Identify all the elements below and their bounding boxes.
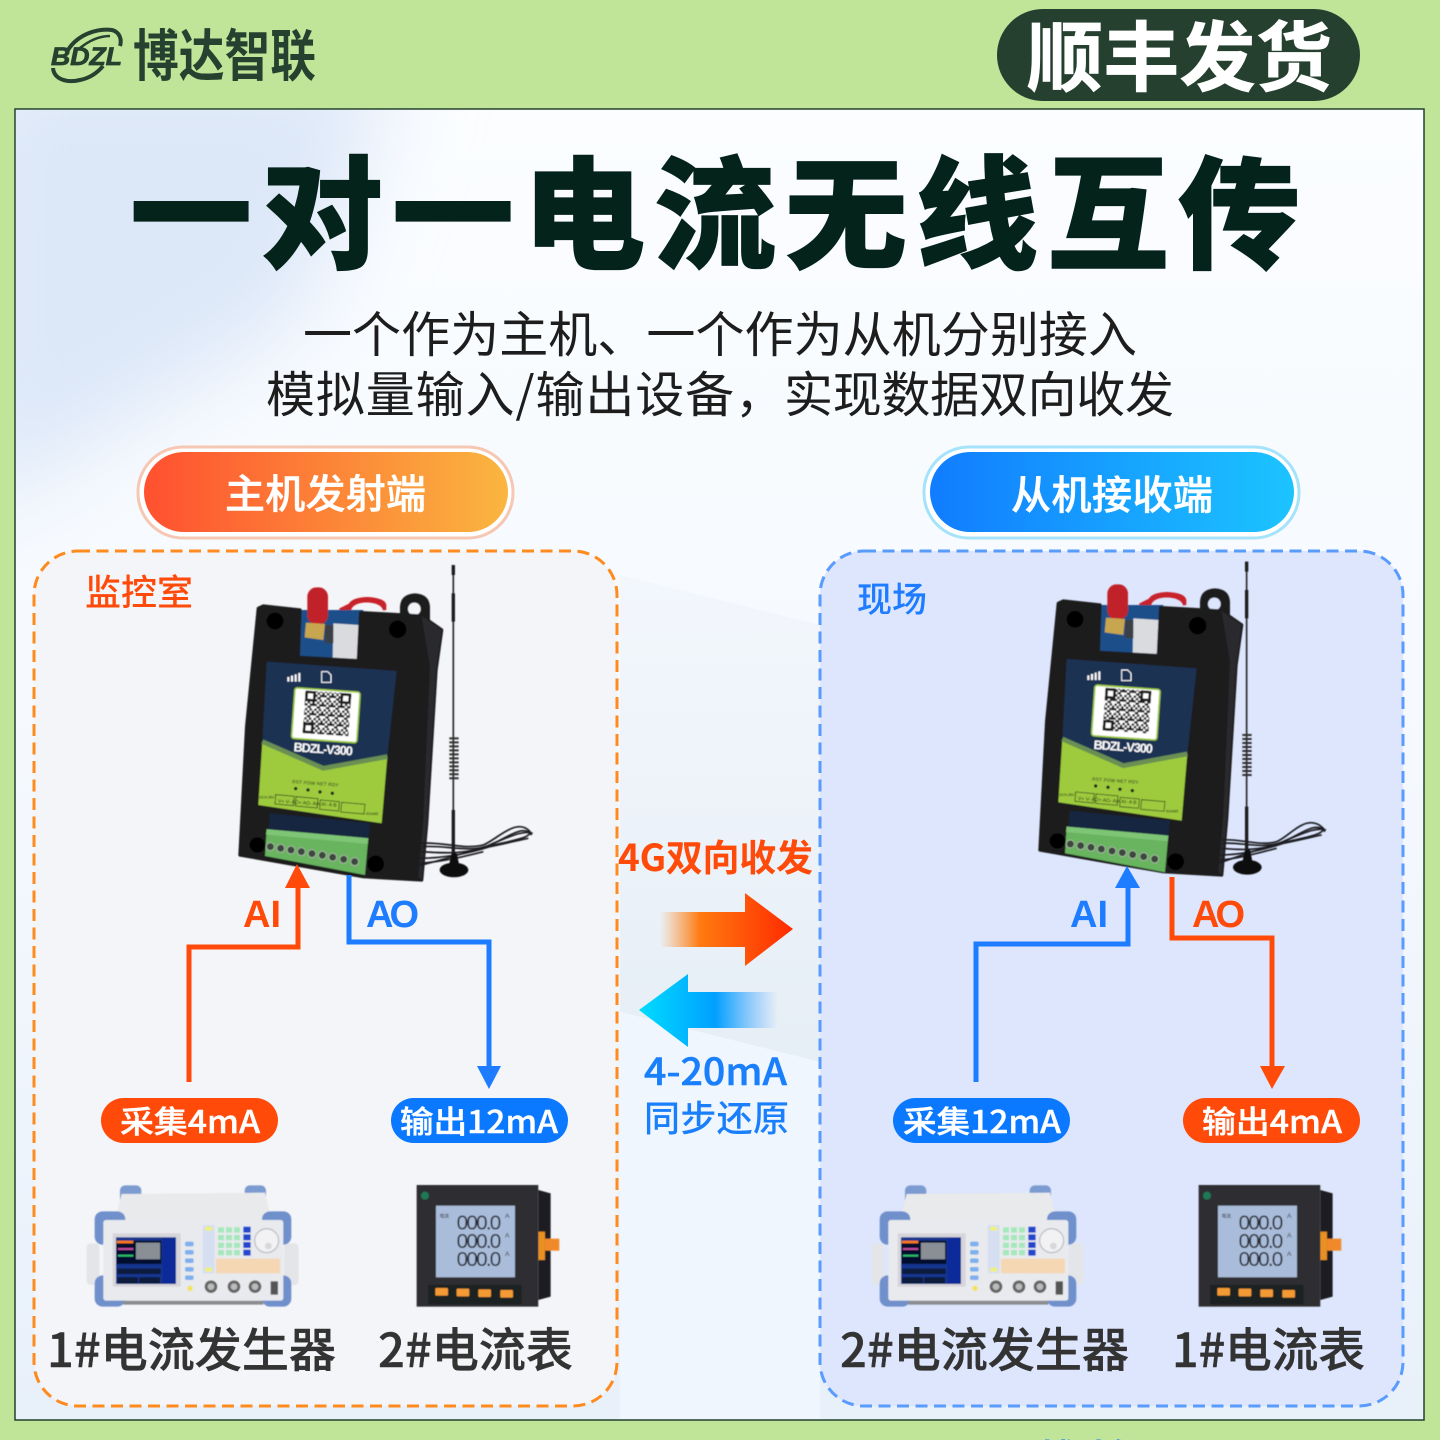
device: current meter right	[1199, 1185, 1341, 1307]
device: current meter right: A	[1287, 1251, 1292, 1258]
subtitle: 一个作为主机、一个作为从机分别接入	[303, 296, 1137, 367]
label: meter 1: 1#电流表	[1172, 1312, 1365, 1381]
centre label: 4-20mA sync: 同步还原	[644, 1090, 789, 1142]
arrow: AI input right	[976, 866, 1140, 1082]
device: BDZL-V300 master: BDZL-V300	[293, 740, 353, 758]
device: BDZL-V300 slave	[1040, 562, 1326, 875]
centre label: 4-20mA sync	[644, 1042, 789, 1142]
label: generator 2: 2#电流发生器	[840, 1312, 1129, 1381]
device: current meter right: A	[1287, 1232, 1292, 1239]
tag: acquire 12mA: 采集12mA	[903, 1097, 1062, 1142]
device: BDZL-V300 slave: RS485	[1166, 808, 1179, 813]
device: BDZL-V300 slave: DC9-35V	[1059, 793, 1075, 797]
device: current generator right	[872, 1185, 1084, 1307]
subtitle: 实现数据双向收发	[784, 356, 1174, 427]
device: current meter	[417, 1185, 559, 1307]
arrow: AO output right	[1172, 877, 1285, 1089]
device: current meter: 000.0	[457, 1230, 501, 1253]
device: BDZL-V300 slave: BDZL-V300	[1093, 738, 1153, 756]
label: AO: AO	[366, 894, 419, 936]
panel: field site	[820, 551, 1403, 1406]
device: current meter: A	[505, 1213, 510, 1220]
panel heading: control room: 监控室	[85, 564, 193, 616]
label: meter 2: 2#电流表	[378, 1312, 573, 1381]
label: AO right: AO	[1192, 894, 1245, 936]
device: BDZL-V300 master: V+ V- AO+ AO- AI+ AI- A B	[278, 799, 337, 809]
arrow: left blue	[639, 974, 778, 1047]
device: BDZL-V300 slave: V+ V- AO+ AO- AI+ AI- A B	[1078, 796, 1137, 806]
device: current meter right: A	[1287, 1213, 1292, 1220]
subtitle	[266, 296, 1174, 427]
device: current meter right: 000.0	[1239, 1212, 1283, 1235]
pill: master transmitter: 主机发射端	[225, 462, 426, 520]
pill: slave receiver: 从机接收端	[1011, 463, 1213, 521]
logo mark	[51, 30, 122, 81]
panel: control room	[34, 551, 617, 1406]
device: current meter right: 电流	[1222, 1213, 1231, 1220]
panel heading: field site: 现场	[857, 572, 927, 623]
label: generator 1: 1#电流发生器	[47, 1312, 336, 1381]
device: BDZL-V300 master: DC9-35V	[259, 796, 275, 800]
device: BDZL-V300 master: RST POW NET RDY	[292, 779, 339, 788]
device: current meter: 电流	[440, 1213, 449, 1220]
label: AI: AI	[243, 894, 281, 936]
header logo	[51, 12, 316, 93]
logo wordmark: 博达智联	[133, 12, 316, 93]
pill: slave receiver	[924, 447, 1299, 538]
badge: shipping: 顺丰发货	[1027, 0, 1332, 107]
device: current meter: 000.0	[457, 1248, 501, 1271]
device: current meter right: 000.0	[1239, 1248, 1283, 1271]
device: current meter: A	[505, 1251, 510, 1258]
arrow: right orange	[660, 893, 793, 966]
centre label: 4-20mA sync: 4-20mA	[644, 1042, 787, 1096]
pill: master transmitter	[138, 447, 513, 538]
tag: output 4mA: 输出4mA	[1202, 1097, 1343, 1142]
device: current meter right: 000.0	[1239, 1230, 1283, 1253]
tag: output 12mA: 输出12mA	[400, 1097, 559, 1142]
centre label: 4G bidirectional: 4G双向收发	[618, 828, 813, 882]
device: BDZL-V300 master: RS485	[366, 811, 379, 816]
device: BDZL-V300 master	[240, 565, 533, 880]
device: current meter: A	[505, 1232, 510, 1239]
logo mark: BDZL	[51, 43, 122, 71]
label: AI right: AI	[1070, 894, 1108, 936]
arrow: AO output	[349, 875, 501, 1089]
device: current generator	[87, 1185, 299, 1307]
title: 一对一电流无线互传	[130, 118, 1300, 295]
device: current meter: 000.0	[457, 1212, 501, 1235]
device: BDZL-V300 slave: RST POW NET RDY	[1092, 777, 1139, 785]
tag: acquire 4mA: 采集4mA	[120, 1097, 261, 1142]
arrow: AI input	[189, 864, 310, 1082]
subtitle: 模拟量输入/输出设备，	[266, 356, 784, 427]
